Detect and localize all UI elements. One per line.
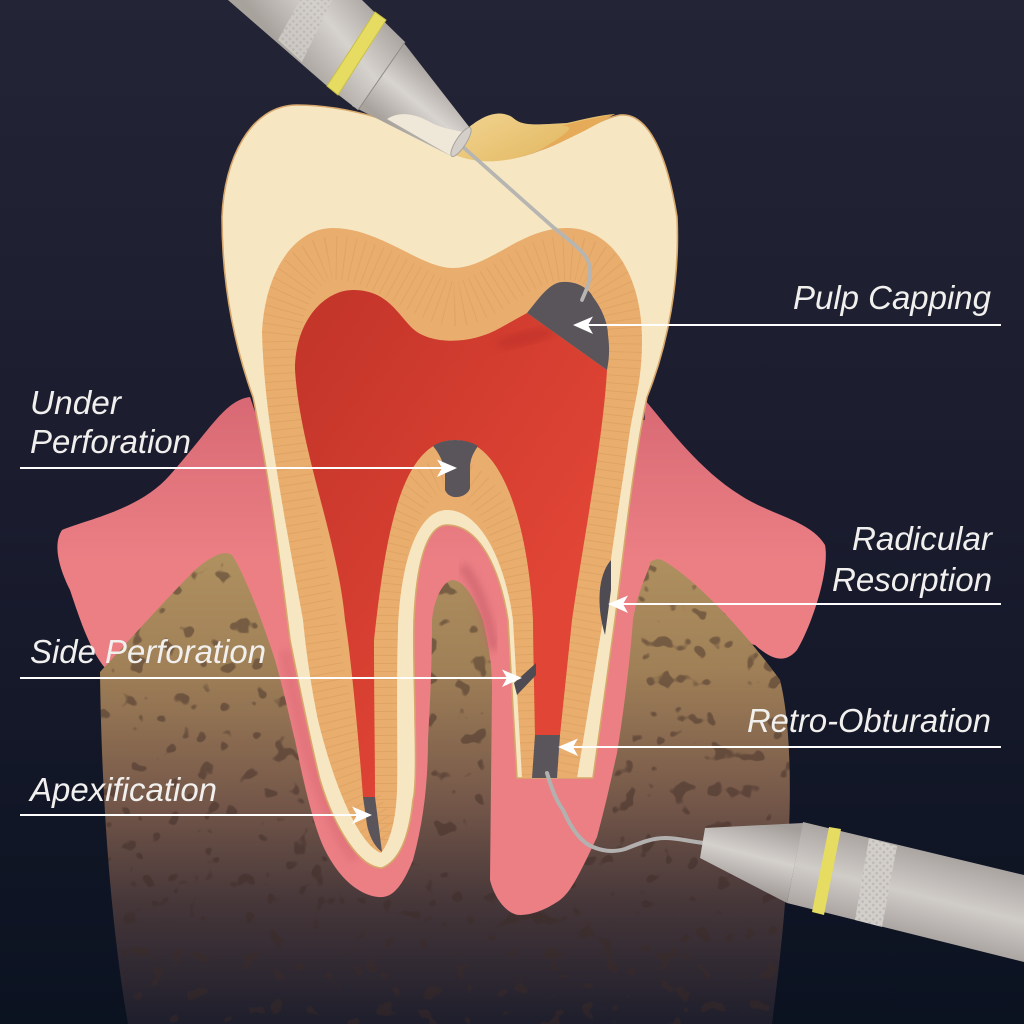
label: Apexification [20, 771, 372, 824]
nozzle highlight [387, 114, 466, 157]
nozzle tip [448, 125, 474, 159]
instrument wire: bottom [547, 773, 705, 851]
label: Retro-Obturation: Retro-Obturation [747, 702, 991, 739]
label: Pulp Capping: Pulp Capping [793, 279, 992, 316]
dental instrument: top handpiece [228, 0, 474, 159]
knurled grip [855, 838, 897, 927]
alveolar bone with porous texture [90, 540, 800, 1024]
collar seam [358, 42, 405, 110]
under perforation material [433, 440, 478, 497]
label: Side Perforation: Side Perforation [30, 633, 266, 670]
gum shading along left root [285, 650, 355, 860]
label: Retro-Obturation [558, 702, 1001, 756]
side perforation defect [514, 663, 536, 695]
label: Pulp Capping [573, 279, 1001, 334]
body [787, 822, 1024, 962]
label: Apexification: Apexification [28, 771, 217, 808]
tooth [222, 105, 677, 868]
arrow: retro-obturation [558, 738, 578, 756]
label: Under Perforation [20, 384, 457, 477]
radicular resorption defect [599, 560, 611, 635]
arrow: radicular resorption [608, 596, 628, 613]
gum around the roots [232, 420, 650, 915]
label: Radicular Resorption: Radicular [852, 520, 994, 557]
instrument wire: top [463, 147, 590, 300]
apexification plug [363, 797, 382, 852]
knurled grip [278, 0, 332, 62]
tapered nozzle [352, 38, 470, 157]
pulp chamber and canals [295, 290, 607, 797]
gum flap: right [640, 400, 826, 659]
arrow: apexification [352, 806, 372, 824]
handle and collar [228, 0, 405, 110]
enamel [222, 105, 677, 868]
label: Under Perforation: Perforation [30, 423, 191, 460]
label: Side Perforation [20, 633, 522, 687]
dental instrument: bottom handpiece [700, 822, 1024, 962]
cavity filling in the crown [455, 113, 615, 161]
yellow band [812, 827, 841, 915]
label: Radicular Resorption [608, 520, 1001, 613]
arrow: side perforation [502, 670, 522, 687]
gum fold shading [462, 566, 494, 650]
pulp capping material [527, 282, 609, 370]
gum flap: left [57, 397, 285, 668]
label: Under Perforation: Under [30, 384, 123, 421]
arrow: pulp capping [573, 316, 593, 334]
arrow: under perforation [437, 460, 457, 477]
yellow band [327, 12, 386, 95]
pulp shadow under capping [494, 324, 556, 352]
tapered nozzle [700, 823, 803, 903]
retro-obturation material [532, 735, 560, 778]
dentin [262, 228, 642, 853]
label: Radicular Resorption: Resorption [832, 561, 992, 598]
